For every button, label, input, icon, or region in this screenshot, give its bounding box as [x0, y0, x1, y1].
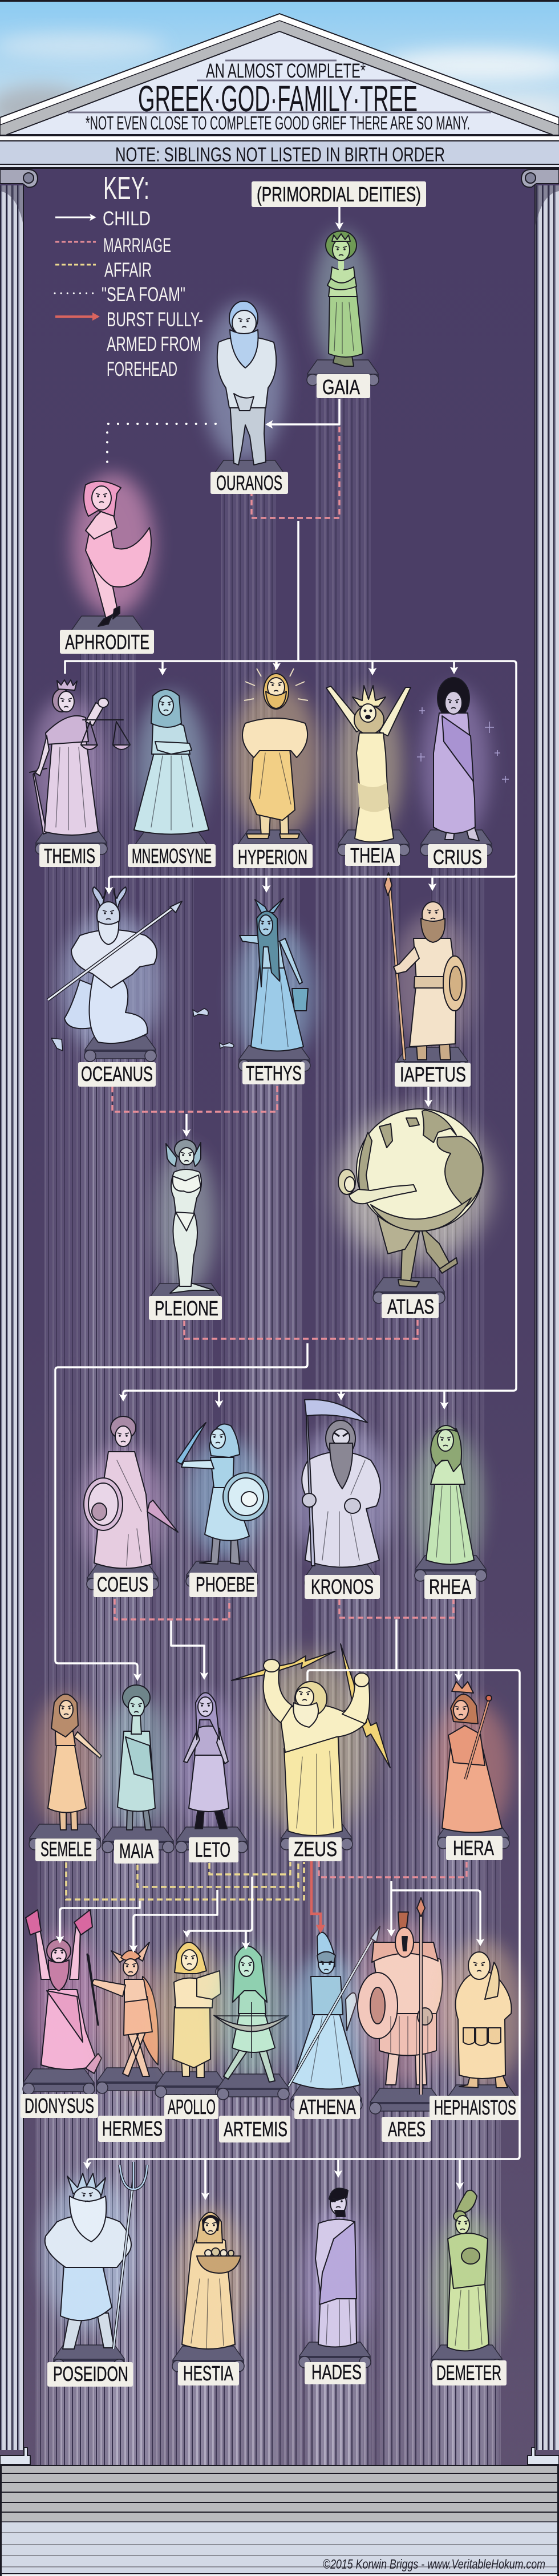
name label: THEMIS	[44, 844, 95, 868]
subtitle: AN ALMOST COMPLETE*	[206, 60, 366, 82]
key: child: CHILD	[103, 208, 151, 230]
lightning bolts	[232, 1644, 390, 1768]
name label: HERA	[453, 1836, 494, 1860]
statue: Kronos	[292, 1400, 392, 1599]
name label: ARES	[388, 2117, 426, 2141]
statue: Poseidon	[42, 2162, 147, 2387]
name label: COEUS	[97, 1573, 148, 1596]
name label: HADES	[311, 2360, 362, 2384]
name label: ZEUS	[294, 1837, 337, 1861]
name label	[98, 2116, 165, 2142]
name label	[432, 2360, 507, 2385]
name label: ATLAS	[387, 1295, 434, 1318]
statue: Ares	[354, 1898, 454, 2142]
statue: Gaia	[307, 231, 379, 399]
statue: Hestia	[172, 2208, 246, 2385]
statue: Tethys	[235, 898, 315, 1085]
statue: Ouranos	[202, 301, 288, 495]
label: primordial deities	[252, 181, 426, 207]
name label: ATHENA	[299, 2095, 356, 2119]
temple steps	[0, 2465, 559, 2576]
name label	[178, 2362, 239, 2385]
statue: Zeus	[232, 1644, 390, 1861]
statue: Apollo	[155, 1942, 227, 2119]
name label: PHOEBE	[196, 1573, 255, 1596]
key: burst fully armed: ARMED FROM	[107, 333, 201, 355]
name label: DIONYSUS	[25, 2094, 94, 2117]
statue: Atlas with globe	[337, 1109, 491, 1318]
name label	[60, 630, 154, 654]
name label	[189, 1837, 238, 1862]
name label: THEIA	[350, 844, 395, 867]
name label: HESTIA	[183, 2362, 233, 2385]
frieze note band	[0, 140, 559, 169]
statue: Hermes	[88, 1942, 168, 2142]
fish	[51, 1008, 234, 1051]
name label	[382, 2117, 431, 2142]
name label: CRIUS	[433, 845, 482, 869]
name label	[164, 2095, 218, 2119]
statue: Iapetus	[384, 873, 472, 1087]
name label: APOLLO	[168, 2095, 216, 2119]
statue: Hades	[299, 2188, 371, 2384]
name label: APHRODITE	[65, 630, 149, 654]
name label: MNEMOSYNE	[132, 844, 212, 868]
name label: GAIA	[322, 375, 360, 399]
name label: MAIA	[119, 1839, 153, 1862]
name label: POSEIDON	[53, 2362, 128, 2385]
right side column	[521, 169, 559, 2465]
name label	[128, 844, 216, 868]
key heading: KEY:	[103, 170, 149, 206]
statue: Phoebe	[176, 1423, 269, 1597]
statue: Theia	[326, 686, 411, 867]
arm and head	[338, 1169, 416, 1204]
statue: Hera	[430, 1682, 512, 1860]
label: primordial deities: (PRIMORDIAL DEITIES)	[257, 183, 421, 206]
spear	[289, 1926, 380, 2086]
name label: KRONOS	[311, 1575, 374, 1598]
name label: DEMETER	[436, 2361, 501, 2384]
statue: Athena	[287, 1926, 380, 2119]
family tree connection lines	[55, 207, 520, 2198]
sky and clouds	[0, 0, 559, 136]
name label	[35, 1837, 96, 1861]
key legend	[55, 170, 203, 380]
name label	[219, 2116, 290, 2142]
name label	[242, 1062, 305, 1085]
name label: HYPERION	[238, 845, 307, 869]
statue: Semele	[29, 1694, 102, 1861]
name label	[294, 2095, 360, 2119]
affair lines	[66, 1862, 304, 1899]
statue: Coeus	[82, 1416, 178, 1597]
name label: LETO	[195, 1838, 230, 1861]
name label: IAPETUS	[400, 1063, 466, 1086]
statue: Demeter	[431, 2190, 507, 2385]
name label	[149, 1296, 222, 1320]
key: affair: AFFAIR	[104, 259, 152, 281]
statue: Crius	[417, 678, 509, 869]
key: burst fully armed	[55, 309, 203, 380]
statue: Aphrodite	[60, 473, 154, 654]
spear	[417, 1898, 425, 2095]
spear	[48, 901, 182, 1000]
statue: Maia	[102, 1685, 174, 1864]
burst from forehead arrow	[311, 1861, 321, 1931]
sea foam dots	[107, 424, 216, 471]
statue: Themis	[30, 680, 130, 868]
statue: Dionysus	[21, 1910, 102, 2118]
name label: TETHYS	[246, 1062, 302, 1085]
statue: Rhea	[412, 1425, 487, 1599]
scepter	[465, 1695, 492, 1779]
name label: RHEA	[429, 1575, 471, 1598]
child arrows	[55, 207, 520, 2198]
key: burst fully armed: BURST FULLY-	[107, 309, 203, 331]
sparkles	[417, 707, 509, 783]
name label: ARTEMIS	[224, 2117, 287, 2141]
name label	[430, 2096, 520, 2120]
name label	[233, 844, 313, 869]
statue: Leto	[176, 1693, 248, 1862]
name label	[21, 2094, 98, 2118]
legs	[376, 1212, 457, 1287]
marriage lines	[112, 427, 467, 1877]
name label	[39, 844, 100, 868]
trident	[114, 2162, 147, 2349]
name label: OURANOS	[216, 471, 282, 495]
name label	[114, 1839, 159, 1864]
statue: Hyperion	[231, 662, 320, 869]
key: sea foam: "SEA FOAM"	[102, 283, 185, 306]
name label: SEMELE	[40, 1837, 92, 1861]
statue: Pleione	[149, 1140, 222, 1320]
name label: OCEANUS	[81, 1062, 153, 1086]
pedestal columns behind statues	[35, 382, 501, 2465]
pediment roof	[0, 14, 559, 141]
left side column	[0, 169, 38, 2465]
statue: Hephaistos	[430, 1939, 524, 2120]
name label	[189, 1573, 257, 1597]
key: marriage: MARRIAGE	[103, 234, 171, 257]
statue: Mnemosyne	[128, 690, 216, 868]
name label	[305, 2360, 366, 2384]
statue: Oceanus	[48, 887, 234, 1087]
name label: PLEIONE	[155, 1297, 218, 1320]
frieze note band: NOTE: SIBLINGS NOT LISTED IN BIRTH ORDER	[115, 144, 445, 166]
key: burst fully armed: FOREHEAD	[107, 358, 177, 380]
statue: Artemis	[214, 1946, 290, 2142]
name label: HERMES	[102, 2117, 163, 2140]
name label	[210, 471, 288, 495]
name label	[47, 2362, 133, 2387]
globe	[357, 1109, 483, 1231]
name label	[78, 1062, 156, 1087]
title block	[86, 60, 470, 133]
